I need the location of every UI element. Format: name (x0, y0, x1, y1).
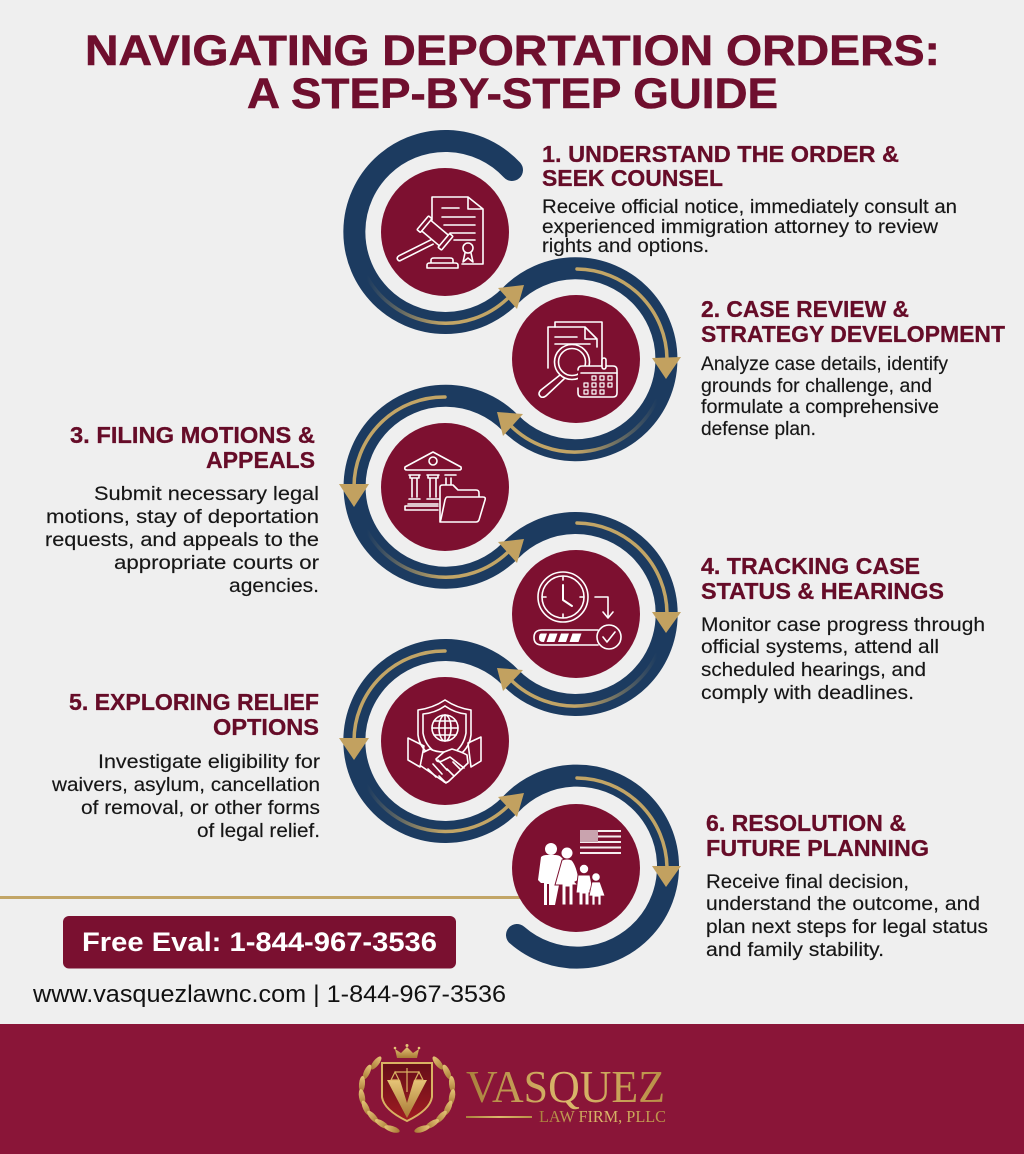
text: step 5: OPTIONS (213, 714, 319, 740)
text: step 4: comply with deadlines. (701, 682, 914, 704)
text: step 1: 1. UNDERSTAND THE ORDER & (542, 141, 899, 167)
text: step 3: 3. FILING MOTIONS & (70, 422, 315, 448)
text: step 4: scheduled hearings, and (701, 659, 926, 681)
text: step 4: STATUS & HEARINGS (701, 578, 944, 604)
text: step 1: rights and options. (542, 235, 709, 257)
text: step 5: of removal, or other forms (81, 797, 320, 819)
text: step 6: plan next steps for legal status (706, 916, 988, 938)
text: step 1 (542, 141, 957, 257)
text: step 2: formulate a comprehensive (701, 396, 939, 418)
text: step 5 (51, 689, 321, 842)
text: step 3: Submit necessary legal (94, 483, 319, 505)
call-to-action button (63, 916, 456, 968)
title (85, 27, 940, 118)
arrow: step 1 to 2 (498, 285, 524, 309)
text: step 5: 5. EXPLORING RELIEF (69, 689, 319, 715)
text: step 5: waivers, asylum, cancellation (51, 774, 320, 796)
contact line: www.vasquezlawnc.com | 1-844-967-3536 (32, 981, 506, 1008)
text: step 4: official systems, attend all (701, 636, 939, 658)
arrow: step 2 down (652, 357, 681, 379)
gold flow lines (354, 269, 667, 867)
text: step 5: Investigate eligibility for (98, 751, 321, 773)
text: step 2: grounds for challenge, and (701, 375, 932, 397)
title: A STEP-BY-STEP GUIDE (247, 70, 778, 118)
text: step 2: 2. CASE REVIEW & (701, 296, 909, 322)
icon: step 1 gavel and document (381, 168, 509, 296)
footer band (0, 1024, 1024, 1154)
text: step 6: 6. RESOLUTION & (706, 810, 906, 836)
text: step 2: defense plan. (701, 418, 816, 440)
arrow: step 4 to 5 (497, 668, 523, 691)
call-to-action button: Free Eval: 1-844-967-3536 (82, 927, 437, 957)
icon: step 5 shield, globe and handshake (381, 677, 509, 805)
text: step 5: of legal relief. (197, 820, 320, 842)
arrow: step 5 to 6 (498, 793, 524, 817)
text: step 1: SEEK COUNSEL (542, 165, 723, 191)
text: step 3: appropriate courts or (114, 552, 320, 574)
gold divider line (0, 896, 522, 899)
text: step 6: FUTURE PLANNING (706, 835, 929, 861)
icon: step 2 magnifier, papers and calendar (512, 295, 640, 423)
text: step 6: Receive final decision, (706, 871, 909, 893)
arrow: step 3 to 4 (498, 539, 524, 563)
icon: step 6 family and flag (512, 804, 640, 932)
text: step 1: Receive official notice, immediately consult an (542, 196, 957, 218)
text: step 6: and family stability. (706, 939, 884, 961)
logo: Vasquez Law Firm: LAW FIRM, PLLC (539, 1107, 666, 1126)
text: step 3: motions, stay of deportation (46, 506, 319, 528)
text: step 6 (706, 810, 988, 961)
text: step 4 (701, 553, 985, 704)
arrow: step 6 down (652, 866, 681, 887)
text: step 3 (45, 422, 320, 597)
icon: step 3 courthouse and folder (381, 423, 509, 551)
text: step 2: Analyze case details, identify (701, 353, 948, 375)
arrow: step 2 to 3 (497, 412, 523, 436)
arrow: step 5 down (339, 738, 369, 760)
serpentine navy ribbon (354, 141, 668, 958)
logo wordmark: VASQUEZ (466, 1062, 665, 1112)
text: step 3: agencies. (229, 575, 319, 597)
arrow: step 4 down (652, 612, 681, 633)
logo: Vasquez Law Firm (358, 1044, 666, 1134)
text: step 2 (701, 296, 1006, 440)
text: step 1: experienced immigration attorney to review (542, 216, 939, 238)
icon: step 4 clock and progress bar (512, 550, 640, 678)
text: step 3: requests, and appeals to the (45, 529, 319, 551)
text: step 4: 4. TRACKING CASE (701, 553, 920, 579)
arrow: step 3 down (339, 484, 369, 507)
title: NAVIGATING DEPORTATION ORDERS: (85, 27, 940, 75)
text: step 2: STRATEGY DEVELOPMENT (701, 321, 1006, 347)
text: step 4: Monitor case progress through (701, 614, 985, 636)
logo crest (358, 1044, 456, 1134)
text: step 3: APPEALS (206, 447, 315, 473)
text: step 6: understand the outcome, and (706, 893, 980, 915)
